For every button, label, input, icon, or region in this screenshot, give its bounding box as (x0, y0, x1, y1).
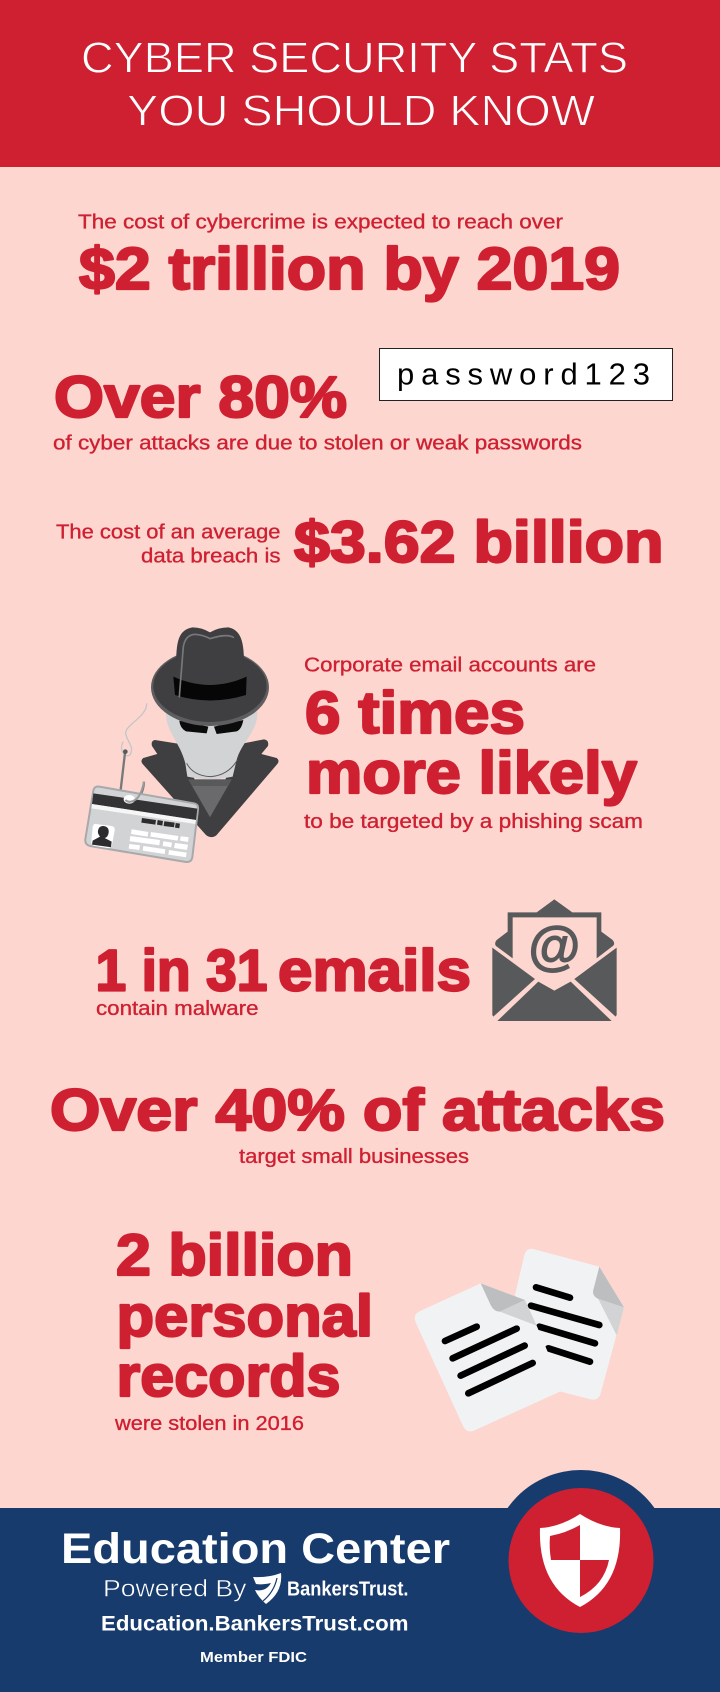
stat: data breach cost (56, 510, 664, 575)
Bankers Trust wordmark: BankersTrust. (287, 1578, 408, 1600)
stat: attacks on small businesses (50, 1078, 665, 1168)
stat: emails with malware: emails (278, 938, 471, 1004)
stat: data breach cost: data breach is (141, 546, 280, 568)
title: CYBER SECURITY STATS (81, 34, 628, 82)
icon: documents (415, 1249, 624, 1431)
stat: data breach cost: $3.62 billion (294, 510, 664, 575)
stat: attacks on small businesses: Over 40% of attacks (50, 1078, 665, 1143)
fishing line (122, 703, 147, 756)
badge: shield (508, 1488, 654, 1633)
icon: open envelope with at sign: @ (528, 917, 580, 976)
stat: emails with malware (96, 938, 471, 1020)
member FDIC: Member FDIC (200, 1649, 307, 1666)
stat: emails with malware: 1 in 31 (96, 938, 268, 1004)
stat: stolen personal records: personal (116, 1284, 373, 1349)
front document (415, 1283, 561, 1431)
powered by: Powered By (103, 1576, 246, 1602)
stat: cost of cybercrime: The cost of cybercrime is expected to reach over (78, 212, 563, 234)
stat: corporate email phishing: more likely (306, 740, 637, 806)
stat: cost of cybercrime (78, 212, 620, 302)
stat: corporate email phishing: Corporate email accounts are (304, 654, 596, 676)
website: Education.BankersTrust.com (101, 1612, 408, 1636)
title: YOU SHOULD KNOW (127, 86, 595, 136)
stat: corporate email phishing: to be targeted by a phishing scam (304, 811, 643, 833)
stat: stolen personal records: were stolen in 2016 (114, 1413, 304, 1435)
stat: stolen or weak passwords: Over 80% (54, 365, 347, 430)
Bankers Trust logo mark (253, 1573, 281, 1604)
ID card (85, 782, 198, 862)
hook (121, 750, 144, 801)
back document (515, 1249, 624, 1400)
stat: data breach cost: The cost of an average (56, 522, 280, 544)
hat (151, 627, 269, 726)
footer heading: Education Center (61, 1525, 450, 1573)
stat: emails with malware: contain malware (96, 998, 258, 1020)
header banner (0, 0, 720, 167)
stat: stolen personal records: records (116, 1344, 340, 1409)
stat: corporate email phishing (304, 654, 643, 833)
icon: hacker with phishing hook and ID card (85, 627, 278, 862)
footer panel (0, 1470, 720, 1692)
icon: open envelope with at sign (492, 899, 617, 1021)
stat: attacks on small businesses: target small businesses (239, 1146, 469, 1168)
stat: stolen personal records: 2 billion (116, 1223, 353, 1288)
stat: stolen personal records (114, 1223, 373, 1435)
password field (380, 348, 672, 400)
sunglasses (179, 720, 243, 734)
coat (141, 739, 278, 837)
stat: stolen or weak passwords (53, 348, 672, 454)
stat: stolen or weak passwords: of cyber attacks are due to stolen or weak passwords (53, 432, 582, 454)
password field: password123 (397, 356, 650, 392)
stat: corporate email phishing: 6 times (305, 680, 525, 746)
title (81, 34, 628, 136)
stat: cost of cybercrime: $2 trillion by 2019 (79, 236, 620, 302)
face and neck (166, 712, 257, 779)
shirt (188, 779, 232, 817)
